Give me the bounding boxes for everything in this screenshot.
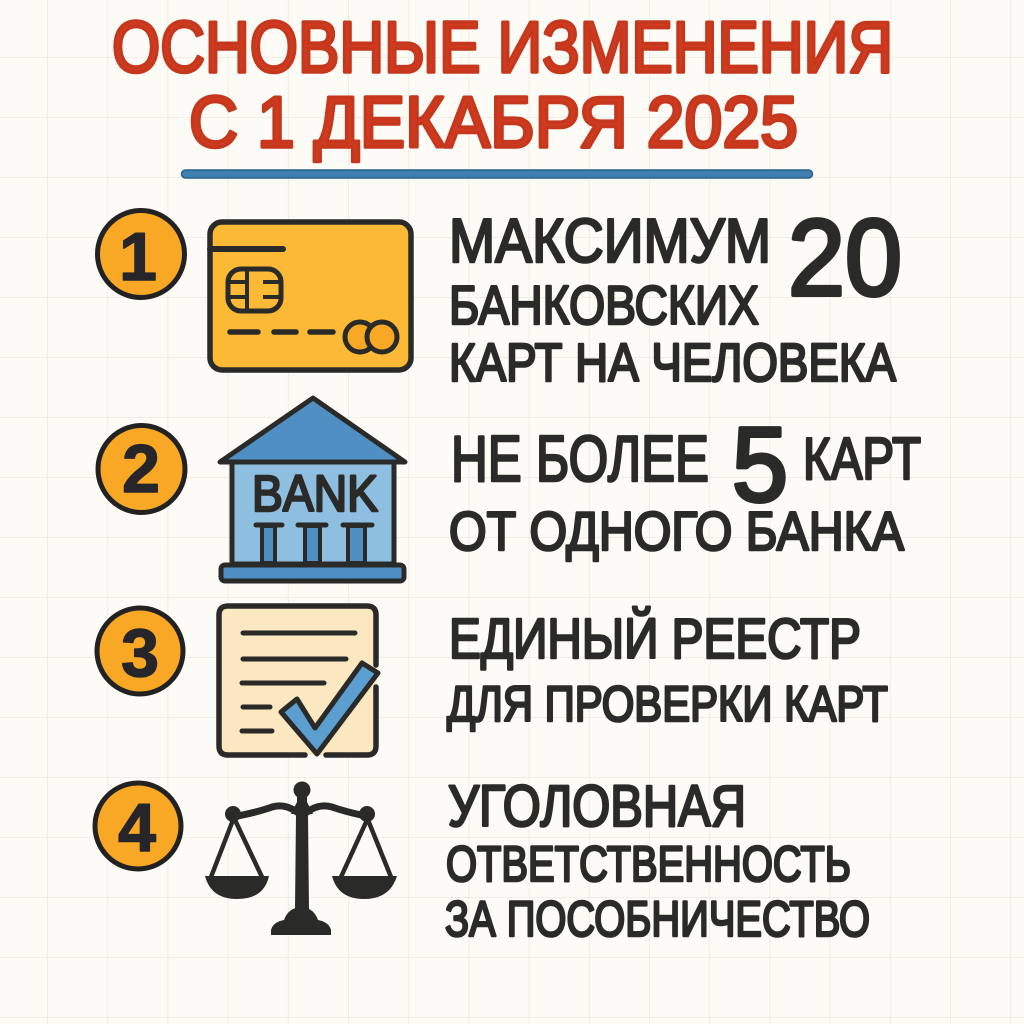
icon: bank card [210,222,411,370]
text block 1: МАКСИМУМ [449,207,771,276]
text block 3 [447,606,888,732]
text block 2: 5 [732,406,788,524]
number badge 3: 3 [121,615,159,691]
bank label: BANK [252,465,378,522]
number badge 4: 4 [118,790,156,866]
number badge 3 [97,608,183,694]
item 4 [95,774,870,947]
text block 2 [449,406,921,562]
number badge 1 [98,210,184,298]
text block 2: НЕ БОЛЕЕ [451,422,709,495]
text block 4: ЗА ПОСОБНИЧЕСТВО [445,890,870,947]
text block 2: КАРТ [803,426,921,492]
item 2 [98,398,921,581]
text block 2: ОТ ОДНОГО БАНКА [449,500,904,562]
text block 1: БАНКОВСКИХ [449,274,759,336]
number badge 1: 1 [119,219,157,295]
icon: bank building [220,398,405,581]
title: С 1 ДЕКАБРЯ 2025 [189,83,798,163]
text block 1: 20 [788,197,902,319]
number badge 2 [98,426,185,512]
icon: scales of justice [205,782,397,935]
icon: document with check mark [219,606,378,755]
number badge 4 [95,783,181,869]
text block 3: ДЛЯ ПРОВЕРКИ КАРТ [447,675,888,732]
text block 4 [445,774,870,947]
text block 4: УГОЛОВНАЯ [448,774,746,839]
item 1 [98,197,902,393]
text block 1 [449,197,902,393]
text block 3: ЕДИНЫЙ РЕЕСТР [449,606,861,670]
title underline [182,170,812,178]
text block 4: ОТВЕТСТВЕННОСТЬ [446,835,851,892]
item 3 [97,606,888,755]
title: ОСНОВНЫЕ ИЗМЕНЕНИЯ [112,8,893,88]
title [112,8,893,163]
text block 1: КАРТ НА ЧЕЛОВЕКА [449,333,896,393]
number badge 2: 2 [122,431,160,507]
